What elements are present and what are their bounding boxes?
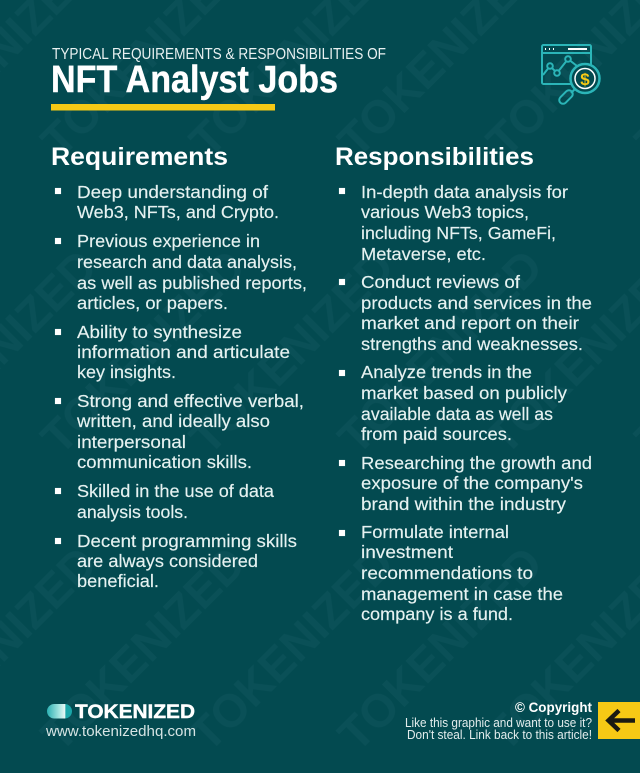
copyright note: Like this graphic and want to use it? <box>405 716 592 730</box>
list: responsibilities: In-depth data analysis for <box>361 182 568 202</box>
website url: www.tokenizedhq.com <box>45 724 196 740</box>
list: responsibilities: including NFTs, GameFi, <box>361 223 556 243</box>
list: requirements: analysis tools. <box>77 502 188 522</box>
list: requirements: articles, or papers. <box>77 293 228 313</box>
logo mark <box>47 704 72 718</box>
list: requirements: Ability to synthesize <box>77 322 242 342</box>
list: responsibilities: recommendations to <box>361 563 533 583</box>
copyright note: Don't steal. Link back to this article! <box>407 728 592 742</box>
list: requirements: Web3, NFTs, and Crypto. <box>77 202 279 222</box>
list: requirements: Decent programming skills <box>77 531 297 551</box>
list: responsibilities: brand within the industry <box>361 494 566 514</box>
list: responsibilities: company is a fund. <box>361 604 513 624</box>
list: requirements: beneficial. <box>77 571 159 591</box>
list: responsibilities: Conduct reviews of <box>361 272 520 292</box>
heading: requirements: Requirements <box>51 143 228 171</box>
list: requirements: as well as published reports, <box>77 273 307 293</box>
icon: analytics magnifier <box>542 45 600 105</box>
list: requirements: communication skills. <box>77 452 252 472</box>
list: responsibilities: available data as well as <box>361 404 553 424</box>
header subtitle: TYPICAL REQUIREMENTS & RESPONSIBILITIES OF <box>52 46 386 63</box>
list: requirements: key insights. <box>77 362 176 382</box>
list: responsibilities: various Web3 topics, <box>361 202 529 222</box>
list: requirements: research and data analysis, <box>77 252 297 272</box>
copyright heading: © Copyright <box>515 700 592 715</box>
list: responsibilities: products and services in the <box>361 293 592 313</box>
list: responsibilities: market based on publicly <box>361 383 567 403</box>
list: requirements: interpersonal <box>77 432 186 452</box>
list: requirements <box>55 182 307 591</box>
logo wordmark: TOKENIZED <box>75 702 195 723</box>
list: responsibilities: investment <box>361 542 453 562</box>
list: responsibilities: from paid sources. <box>361 424 512 444</box>
list: responsibilities <box>339 182 592 624</box>
list: responsibilities: exposure of the company's <box>361 473 583 493</box>
list: responsibilities: Researching the growth and <box>361 453 592 473</box>
list: responsibilities: market and report on their <box>361 313 579 333</box>
list: requirements: Skilled in the use of data <box>77 481 274 501</box>
list: responsibilities: Formulate internal <box>361 522 509 542</box>
list: requirements: are always considered <box>77 551 258 571</box>
list: requirements: Strong and effective verbal, <box>77 391 304 411</box>
title underline <box>51 104 275 110</box>
list: responsibilities: Metaverse, etc. <box>361 244 486 264</box>
heading: responsibilities: Responsibilities <box>335 143 534 171</box>
list: responsibilities: Analyze trends in the <box>361 362 532 382</box>
list: requirements: Deep understanding of <box>77 182 268 202</box>
copyright note <box>405 716 592 742</box>
list: requirements: Previous experience in <box>77 231 260 251</box>
icon: dollar sign: $ <box>580 70 590 89</box>
arrow button <box>598 702 640 739</box>
list: responsibilities: strengths and weaknesses. <box>361 334 583 354</box>
list: responsibilities: management in case the <box>361 584 563 604</box>
title: NFT Analyst Jobs <box>51 59 338 101</box>
list: requirements: written, and ideally also <box>76 411 270 431</box>
list: requirements: information and articulate <box>77 342 290 362</box>
